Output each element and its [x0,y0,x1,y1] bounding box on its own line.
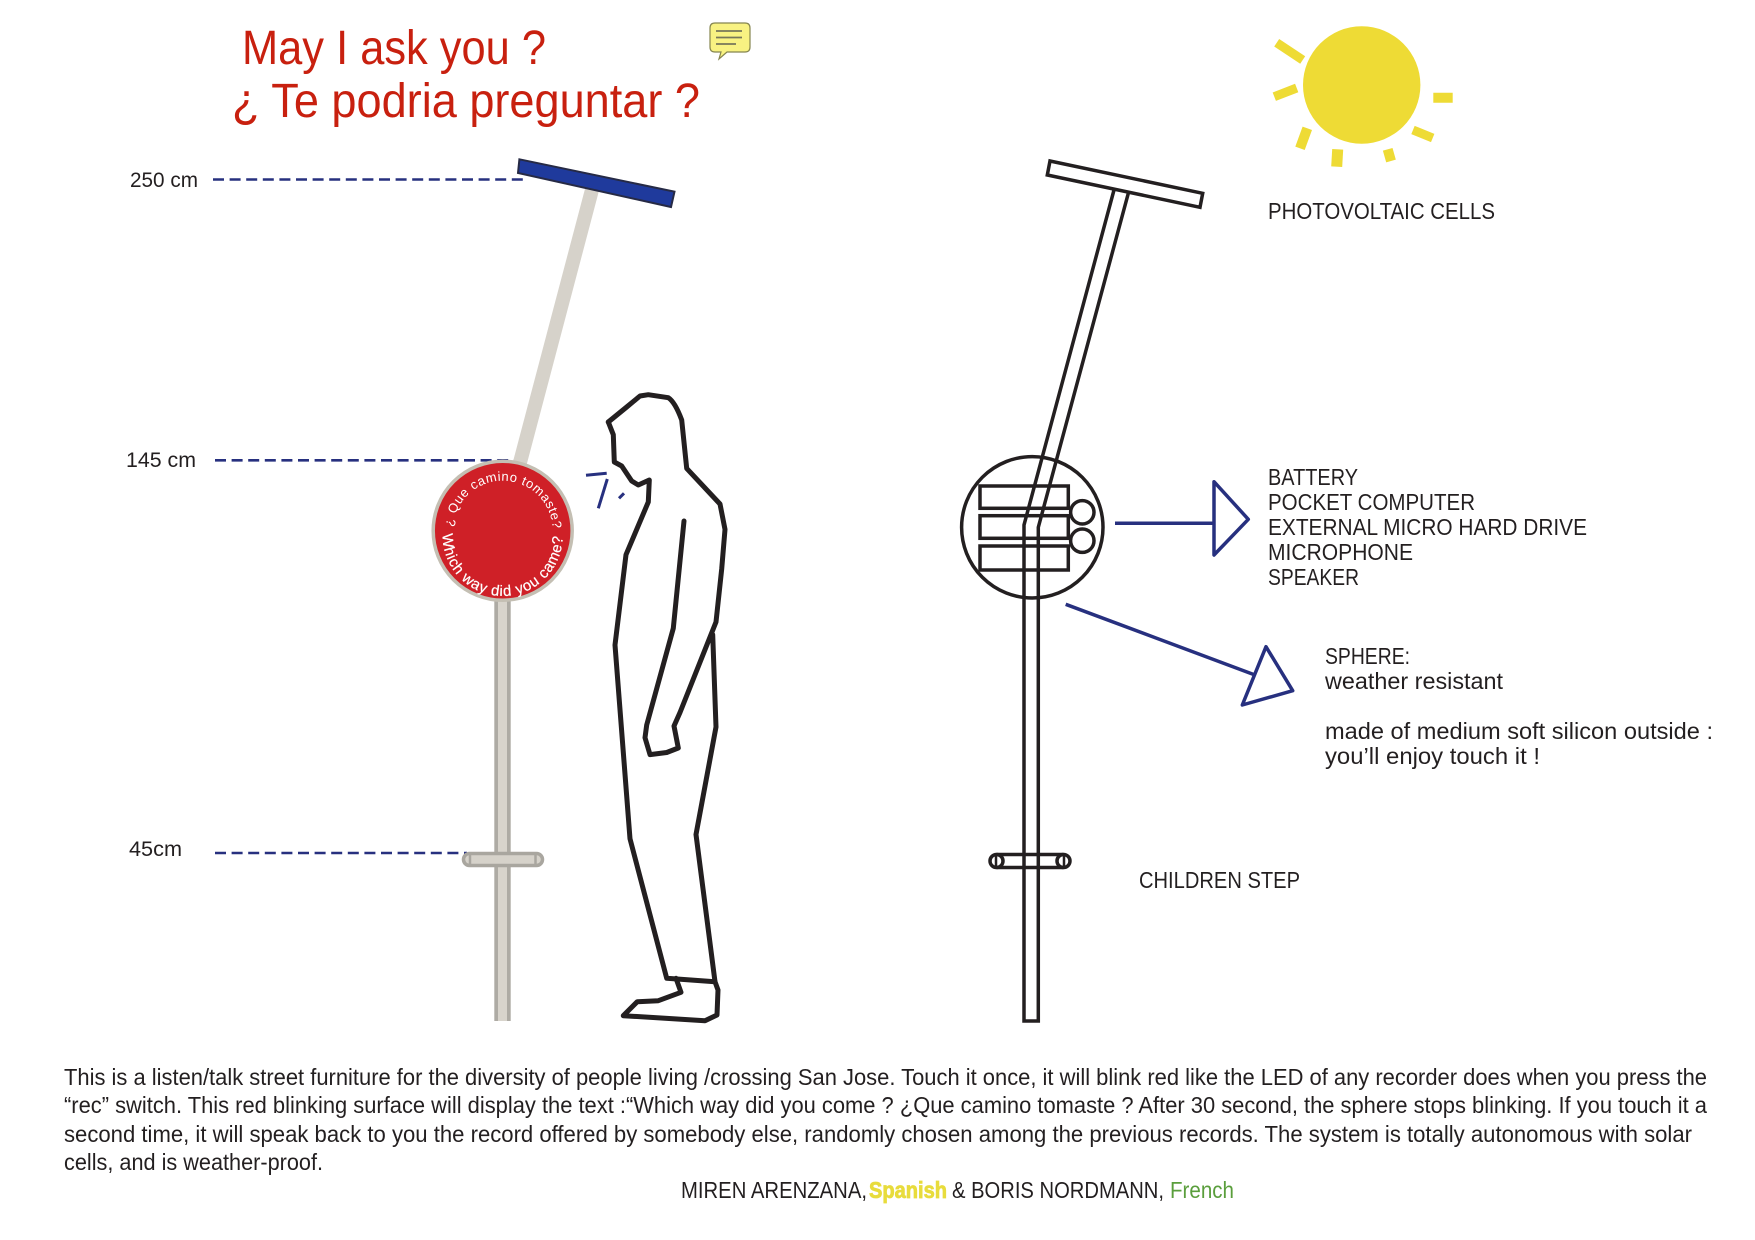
pole outline [1024,190,1128,1021]
component list: EXTERNAL MICRO HARD DRIVE [1268,514,1587,540]
sphere notes: you’ll enjoy touch it ! [1325,743,1540,769]
sphere notes: SPHERE: [1325,643,1410,669]
credits: MIREN ARENZANA, [681,1177,867,1203]
credits: French [1170,1177,1234,1203]
upper gray pole [518,186,593,470]
icon: speech bubble [710,23,750,59]
technical drawing of pole [962,161,1203,1021]
title: ¿ Te podria preguntar ? [232,75,700,128]
children step [464,854,542,866]
label: children step: CHILDREN STEP [1139,867,1300,893]
component list: POCKET COMPUTER [1268,489,1475,515]
component list: BATTERY [1268,464,1358,490]
title [232,22,700,128]
component list [1268,464,1587,590]
description paragraph: “rec” switch. This red blinking surface will display the text :“Which way did you come ? ¿Que camino tomaste ? After 30 second, the sphere stops blinking. If you touch it a [64,1092,1707,1118]
label: 145 cm height: 145 cm [126,449,196,472]
red sphere [433,461,572,600]
icon: sun [1274,26,1453,167]
label: photovoltaic cells: PHOTOVOLTAIC CELLS [1268,198,1495,224]
sphere text: Spanish question: ¿ Que camino tomaste? [446,471,562,528]
component list: SPEAKER [1268,564,1359,590]
internal component boxes [980,486,1068,570]
sphere notes: made of medium soft silicon outside : [1325,718,1713,744]
person silhouette [608,395,725,1021]
component list: MICROPHONE [1268,539,1413,565]
step outline [990,854,1070,868]
sphere outline [962,457,1103,598]
description paragraph: second time, it will speak back to you the record offered by somebody else, randomly chosen among the previous records. The system is totally autonomous with solar [64,1121,1692,1147]
sphere notes: weather resistant [1324,668,1504,694]
credits: Spanish [869,1177,947,1203]
outline panel [1047,161,1203,207]
sphere notes [1324,643,1713,769]
credits: & BORIS NORDMANN, [952,1177,1164,1203]
lower gray pole [494,590,511,1021]
title: May I ask you ? [242,22,546,75]
left pole illustration [432,158,676,1021]
sphere text: English question: Which way did you came? [442,533,563,598]
description paragraph: This is a listen/talk street furniture for the diversity of people living /crossing San Jose. Touch it once, it will blink red like the LED of any recorder does when you press the [64,1064,1707,1090]
description paragraph: cells, and is weather-proof. [64,1149,323,1175]
internal round components [1071,501,1094,552]
solar panel [518,159,674,207]
label: 45 cm height: 45cm [129,838,182,861]
voice marks [586,473,624,508]
arrow: to sphere notes [1066,604,1293,705]
credits [681,1177,1234,1203]
arrow: to components [1115,482,1248,555]
description paragraph [64,1064,1707,1175]
label: 250 cm height: 250 cm [130,169,198,192]
